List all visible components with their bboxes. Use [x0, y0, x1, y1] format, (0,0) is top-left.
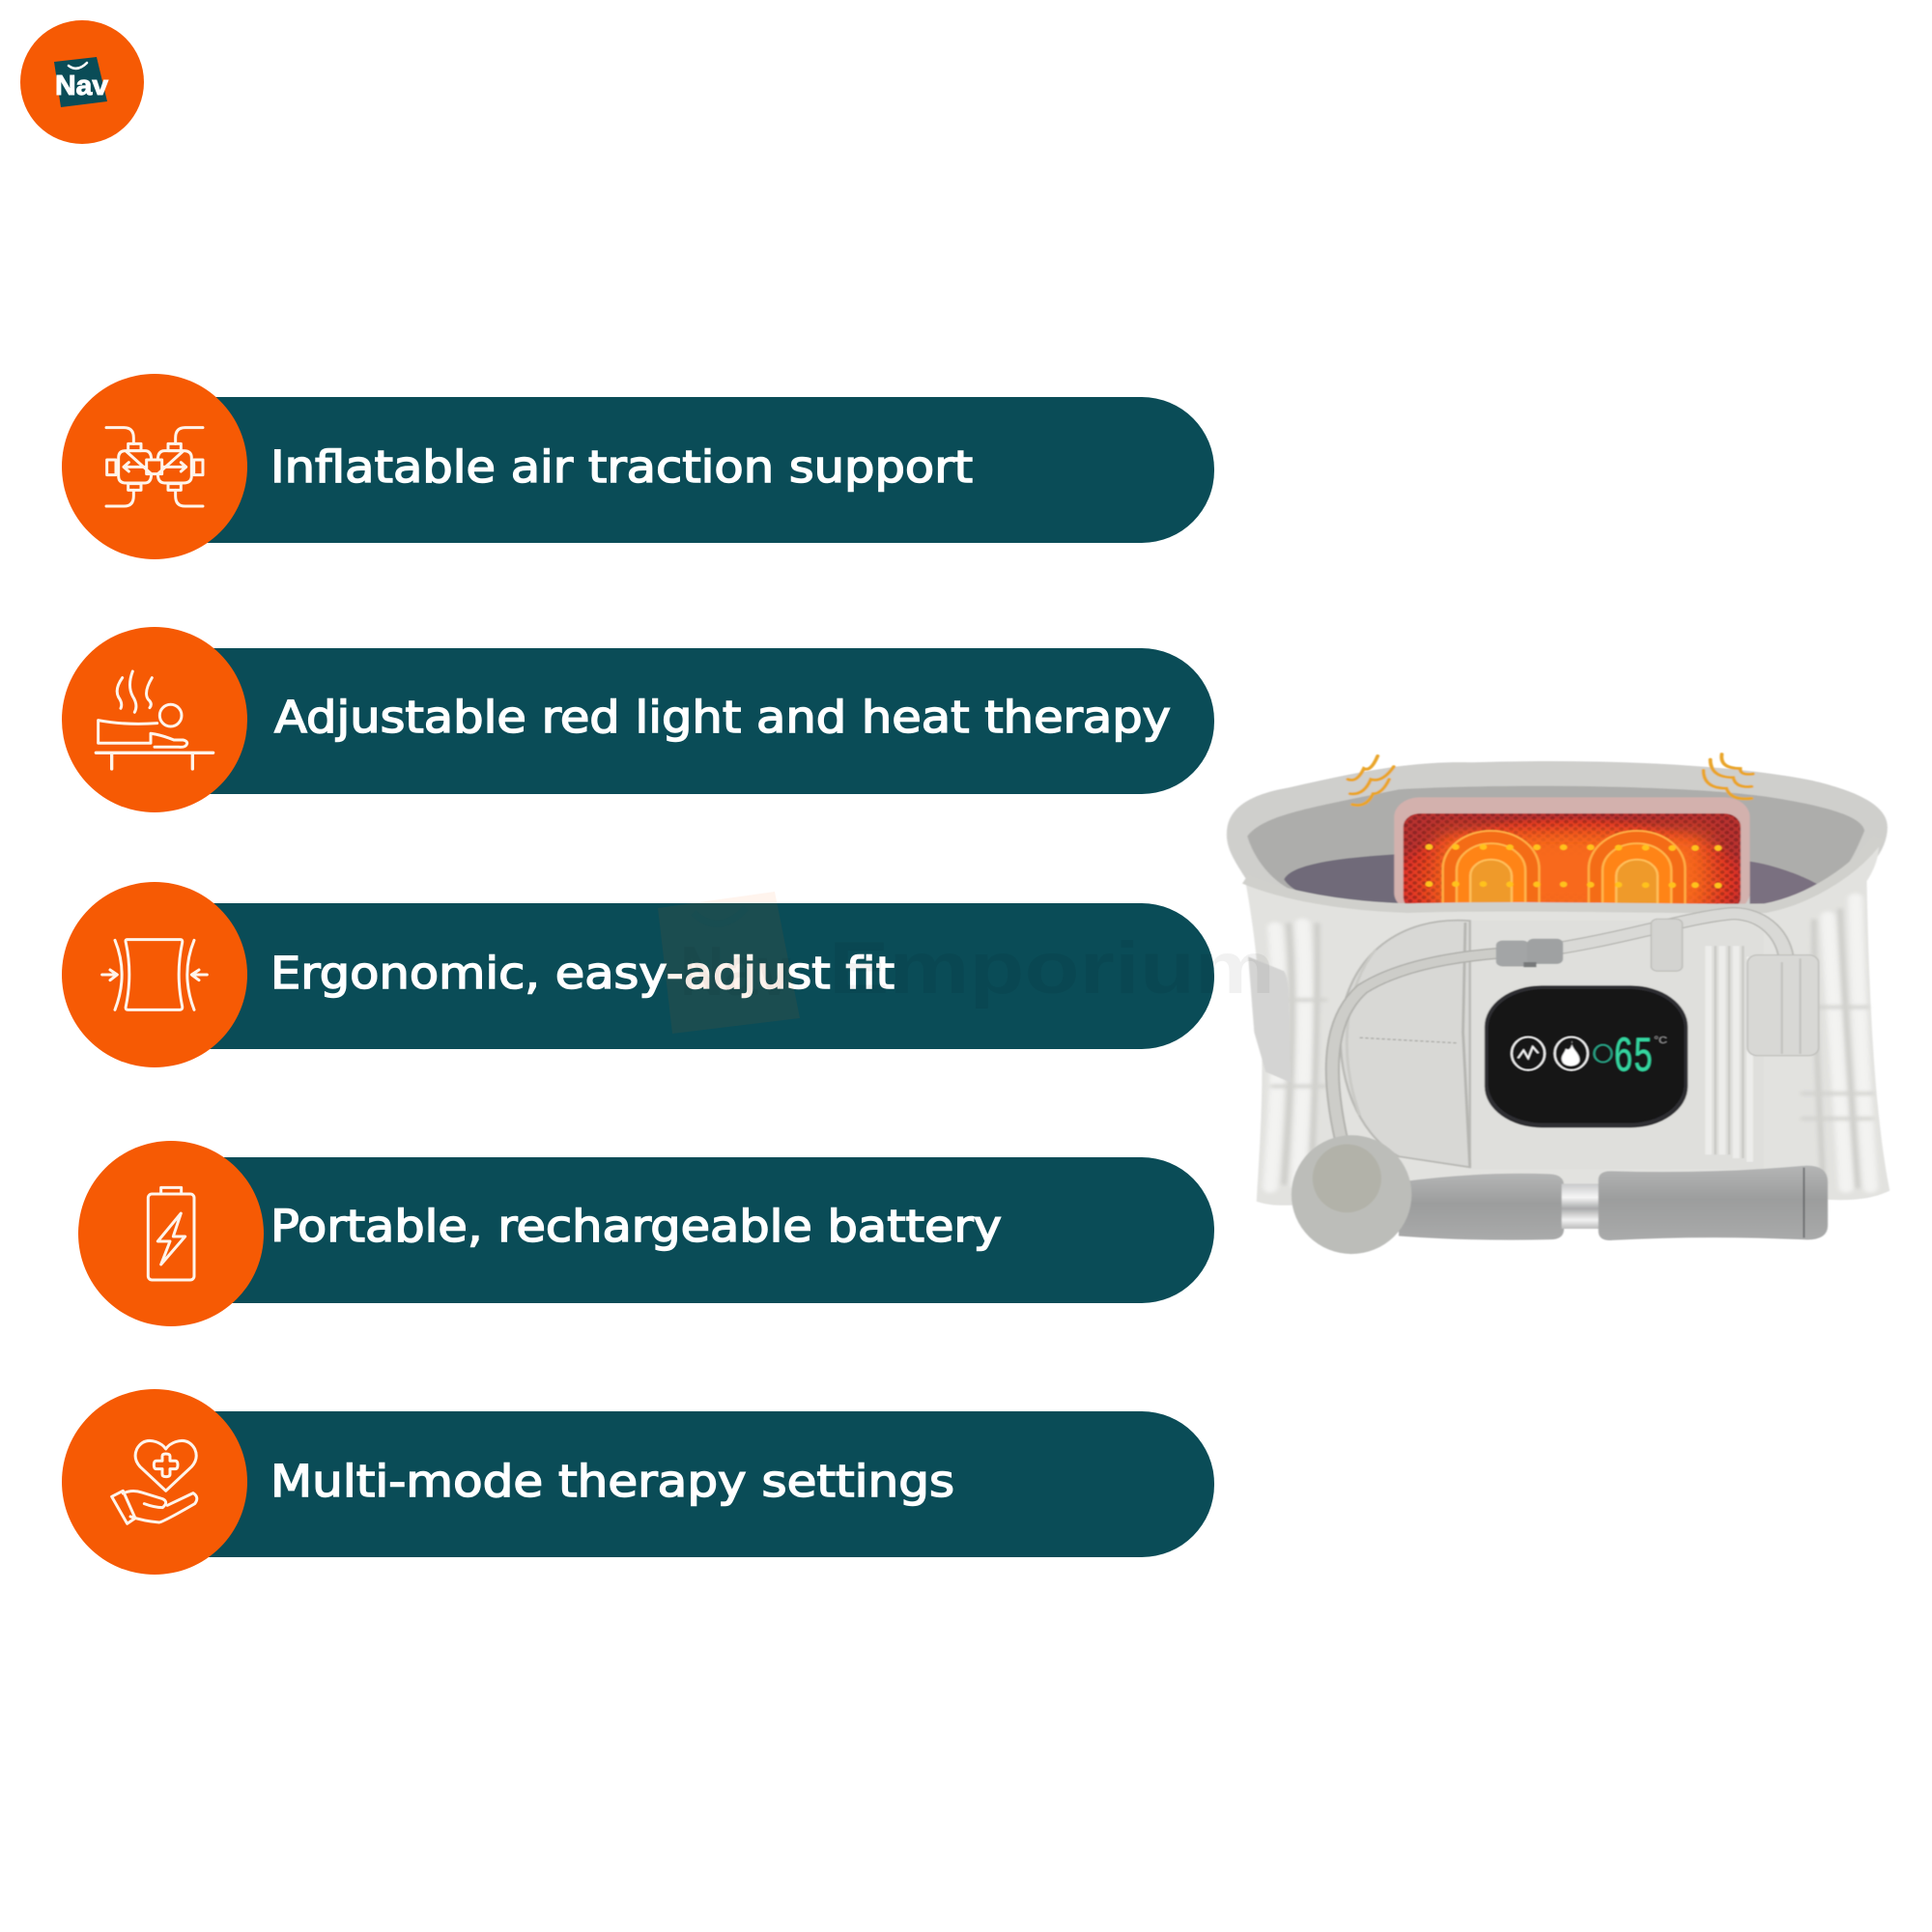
feature text: Ergonomic, easy-adjust fit [270, 948, 895, 999]
logo badge [20, 20, 144, 144]
icon: air traction [106, 428, 203, 506]
orange icon circle [62, 627, 247, 812]
feature row 5 [62, 1389, 1214, 1575]
feature text: Portable, rechargeable battery [270, 1201, 1002, 1252]
tube clip [1651, 919, 1683, 971]
air tube [1332, 914, 1786, 1140]
watermark text: Emporium [829, 927, 1275, 1009]
icon: heart in hand [112, 1440, 197, 1523]
belt front body [1245, 838, 1889, 1206]
orange icon circle [62, 1389, 247, 1575]
pill bar [135, 1157, 1214, 1303]
belt back band [1227, 761, 1888, 910]
watermark wordmark: Nav [680, 933, 791, 1010]
feature text: Adjustable red light and heat therapy [274, 692, 1171, 743]
pill bar [116, 1411, 1214, 1557]
center panel [1470, 921, 1764, 1169]
mode icon [1512, 1037, 1545, 1070]
product: lumbar traction belt [1227, 754, 1889, 1254]
orange icon circle [62, 882, 247, 1067]
tube connector [1496, 939, 1563, 967]
icon: ergonomic fit [102, 940, 207, 1009]
icon: battery [148, 1187, 194, 1280]
flame icon [1555, 1037, 1588, 1070]
degree unit: °C [1654, 1036, 1667, 1045]
feature row 4 [78, 1141, 1214, 1326]
red light heat pad [1394, 797, 1749, 914]
wrap-around strap [1341, 921, 1470, 1167]
status ring [1594, 1045, 1611, 1063]
pump holder clamp [1747, 955, 1819, 1056]
belt top binding [1245, 838, 1878, 909]
watermark smile [694, 908, 746, 923]
hand pump [1292, 1135, 1828, 1254]
heat wave marks [1348, 754, 1753, 806]
pill bar [116, 648, 1214, 794]
feature text: Multi-mode therapy settings [270, 1456, 954, 1507]
feature row 1 [62, 374, 1214, 559]
orange icon circle [62, 374, 247, 559]
air column ribs [1265, 899, 1871, 1187]
pill bar [116, 903, 1214, 1049]
temperature readout: 65 [1613, 1029, 1653, 1086]
control unit display [1485, 985, 1688, 1127]
orange icon circle [78, 1141, 264, 1326]
pill bar [116, 397, 1214, 543]
feature row 3 [62, 882, 1214, 1067]
logo badge: Nav [55, 71, 108, 101]
watermark: Nav Emporium [658, 892, 1275, 1034]
watermark bag [658, 892, 800, 1034]
feature text: Inflatable air traction support [270, 441, 973, 493]
feature row 2 [62, 627, 1214, 812]
velcro side tab [1248, 956, 1291, 1083]
icon: heat therapy [96, 671, 213, 769]
